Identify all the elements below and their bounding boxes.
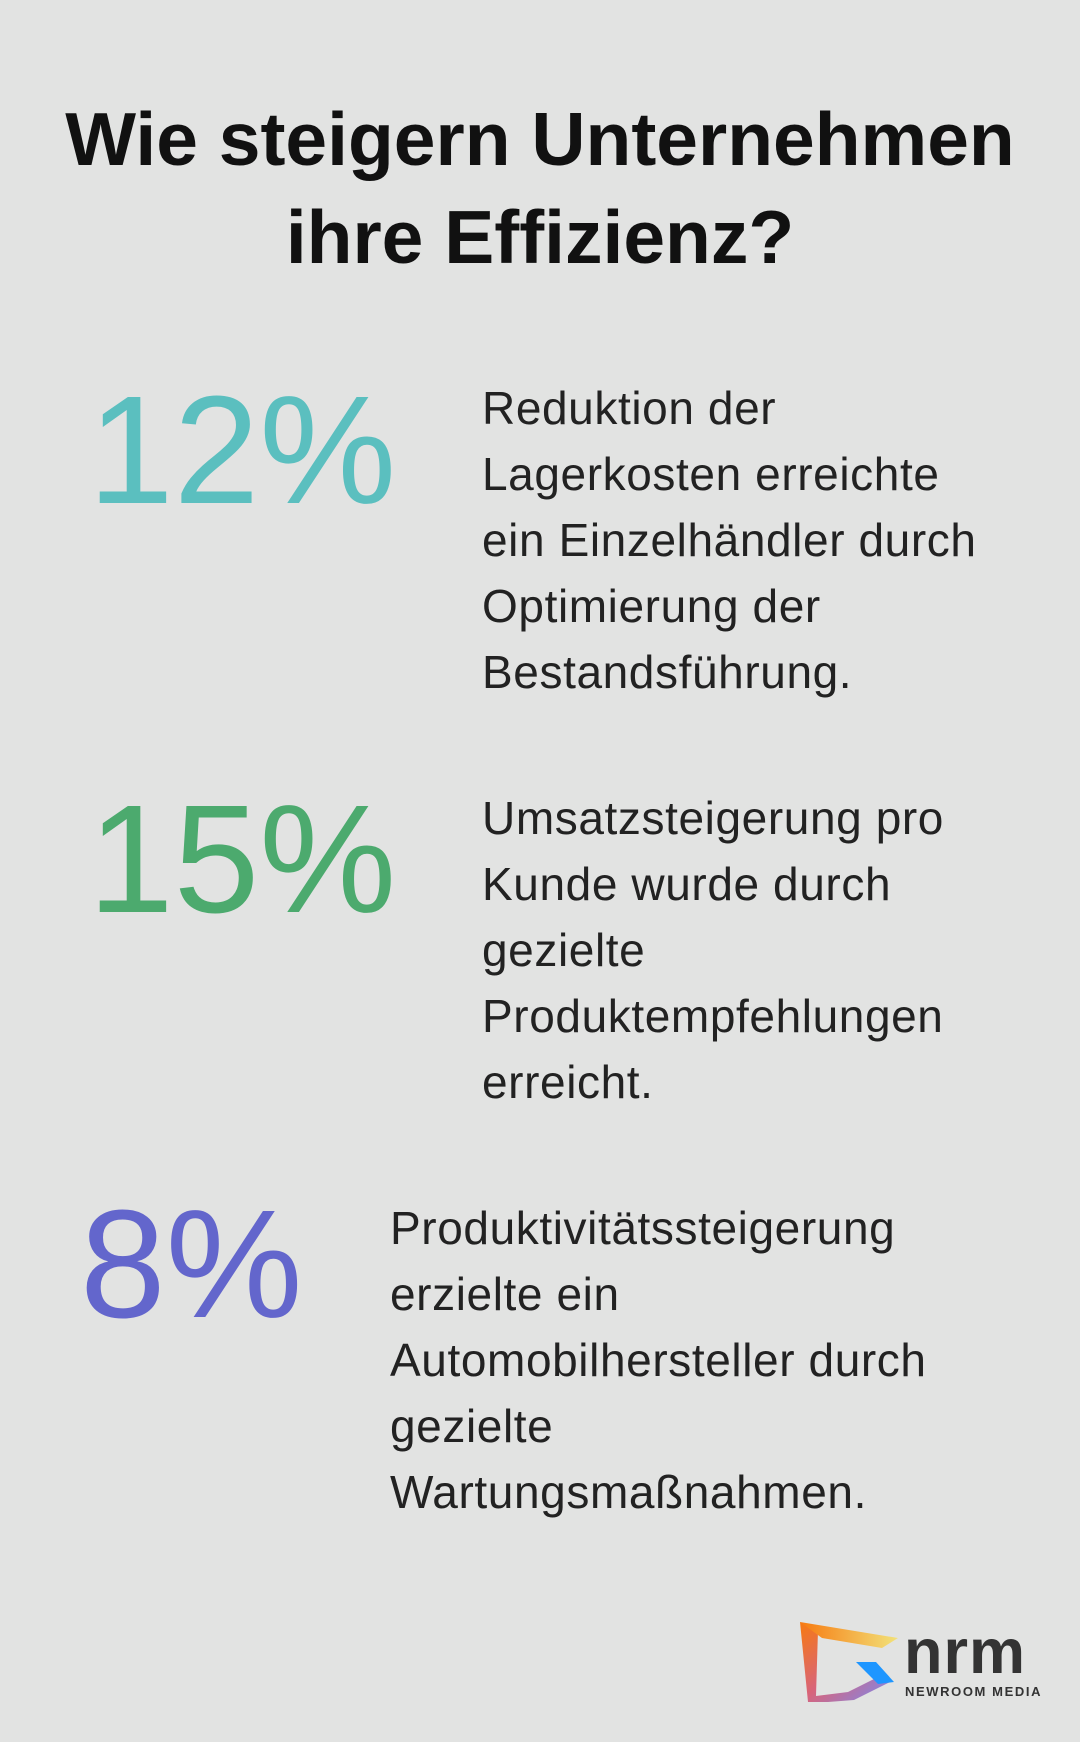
text: 12% description: Bestandsführung. — [482, 646, 852, 698]
text: 15% description — [482, 792, 944, 1108]
title — [65, 97, 1015, 279]
stat: 8%: 8% — [80, 1178, 303, 1350]
text: 8% description: Wartungsmaßnahmen. — [390, 1466, 867, 1518]
text: 12% description: Lagerkosten erreichte — [482, 448, 940, 500]
stat: 12%: 12% — [88, 364, 396, 536]
text: 8% description — [390, 1202, 927, 1518]
logo: nrm newroom media: NEWROOM MEDIA — [905, 1684, 1042, 1699]
text: 8% description: Produktivitätssteigerung — [390, 1202, 895, 1254]
text: 15% description: Kunde wurde durch — [482, 858, 891, 910]
text: 15% description: gezielte — [482, 924, 645, 976]
text: 8% description: erzielte ein — [390, 1268, 620, 1320]
text: 12% description: Reduktion der — [482, 382, 776, 434]
title: ihre Effizienz? — [286, 195, 794, 279]
logo: nrm newroom media — [800, 1617, 1042, 1702]
stat: 15%: 15% — [88, 773, 396, 945]
text: 12% description: Optimierung der — [482, 580, 821, 632]
title: Wie steigern Unternehmen — [65, 97, 1015, 181]
text: 12% description — [482, 382, 977, 698]
logo text: nrm — [904, 1617, 1026, 1687]
text: 8% description: Automobilhersteller durch — [390, 1334, 927, 1386]
text: 15% description: Umsatzsteigerung pro — [482, 792, 944, 844]
icon: logo mark — [800, 1622, 898, 1702]
text: 15% description: Produktempfehlungen — [482, 990, 944, 1042]
text: 12% description: ein Einzelhändler durch — [482, 514, 977, 566]
text: 8% description: gezielte — [390, 1400, 553, 1452]
text: 15% description: erreicht. — [482, 1056, 654, 1108]
